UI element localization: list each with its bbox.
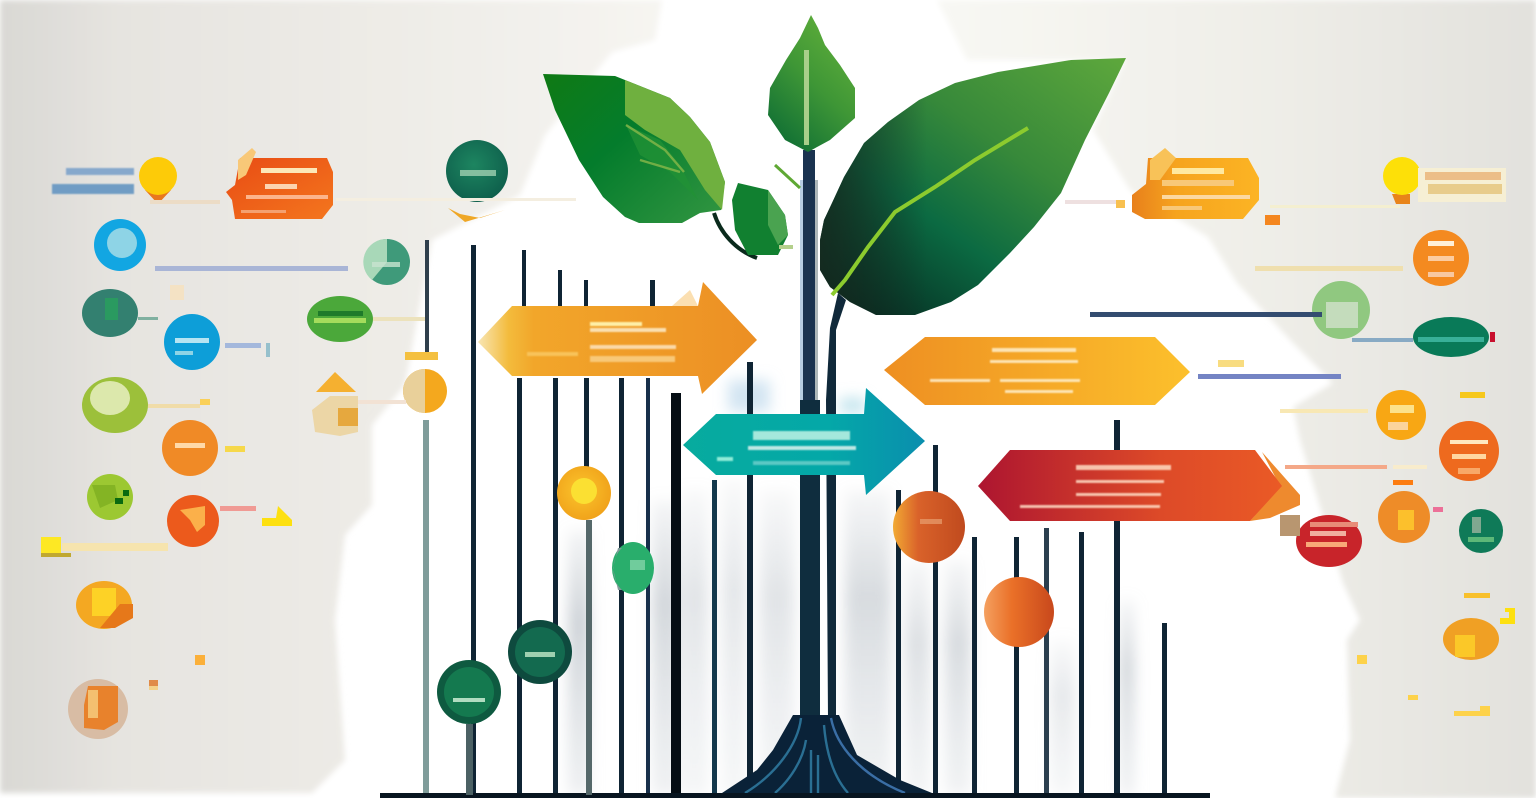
node: coin <box>1443 593 1515 660</box>
node: blue 1 <box>94 219 146 271</box>
leaf: left <box>543 74 757 258</box>
node: red orange <box>167 495 292 547</box>
dots <box>149 655 205 690</box>
node: dark green 2 <box>437 660 501 724</box>
node: lime <box>82 377 210 433</box>
node: leaf green <box>87 474 133 520</box>
node: teal <box>82 289 158 337</box>
dashes <box>1357 655 1490 716</box>
hexagon: amber <box>884 337 1190 405</box>
node: beige <box>312 372 406 436</box>
left column labels <box>41 148 576 739</box>
node: orange <box>1413 230 1469 286</box>
node: orange 1 <box>893 491 965 563</box>
node: dark green pill <box>1352 317 1495 357</box>
node: dark green 1 <box>508 620 572 684</box>
node: orange red <box>1439 421 1499 481</box>
bar shadows <box>568 380 1134 795</box>
node: green pill <box>307 296 425 342</box>
node: red <box>1280 515 1362 567</box>
tag: amber <box>1065 148 1400 225</box>
centre nodes <box>307 140 1054 795</box>
arrow: red <box>978 450 1300 521</box>
dots: pale <box>170 285 184 300</box>
connector: yellow <box>41 537 168 557</box>
node: emerald <box>612 542 654 594</box>
node: amber <box>1280 390 1426 440</box>
connector <box>1198 360 1341 379</box>
leaf: small <box>732 165 800 255</box>
connector <box>1255 266 1403 271</box>
node: dark green <box>1459 509 1503 553</box>
stems <box>800 150 846 720</box>
leaf: top <box>768 15 855 152</box>
connector <box>1090 312 1322 317</box>
node: yellow <box>557 466 611 520</box>
leaf: right <box>820 58 1126 315</box>
node: top green <box>446 140 508 202</box>
right column labels <box>1065 148 1515 716</box>
label: top left text and sun <box>52 157 220 204</box>
node: peach <box>68 679 128 739</box>
connector <box>1285 465 1427 469</box>
arrow: teal <box>683 388 925 495</box>
node: sage <box>1312 281 1370 339</box>
node: orange <box>162 420 245 476</box>
connector <box>155 266 348 271</box>
node: amber coin <box>76 581 133 629</box>
node: pale green <box>363 239 410 285</box>
node: orange 2 <box>984 577 1054 647</box>
bar chart: vertical bars <box>423 240 1167 795</box>
node: amber small <box>1378 480 1443 543</box>
node: blue 2 <box>164 314 270 370</box>
roots <box>722 715 932 793</box>
top right sun and label <box>1383 157 1506 204</box>
node: amber <box>403 352 447 413</box>
ground line <box>380 793 1210 798</box>
plant <box>543 15 1126 793</box>
arrow: orange <box>478 282 757 394</box>
node: amber bracket <box>448 208 505 222</box>
tag: orange <box>226 148 576 219</box>
